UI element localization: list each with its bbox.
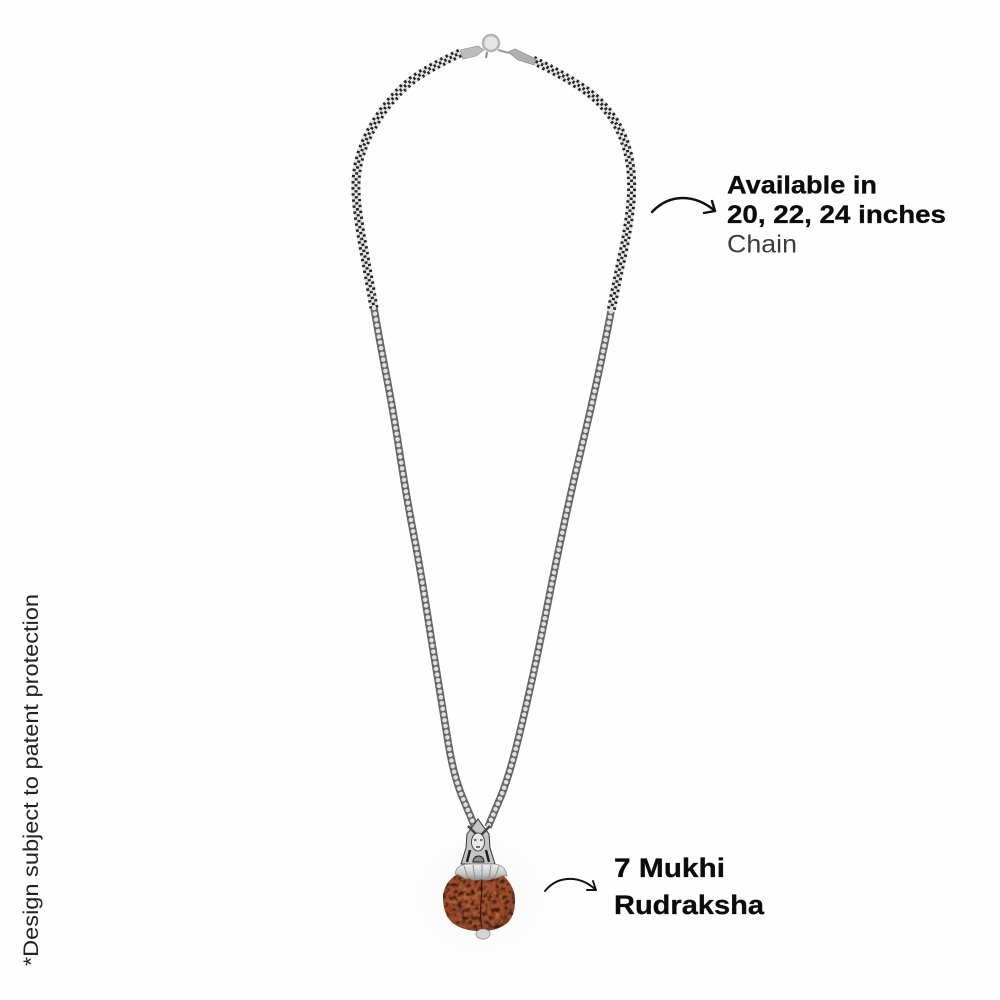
silver bottom bead cap	[476, 929, 490, 939]
soft shadow behind pendant	[390, 815, 570, 975]
arrow to rudraksha callout	[545, 879, 596, 891]
silver deity bail	[461, 819, 495, 864]
callout: chain lengths	[727, 172, 946, 258]
silver petal cap	[455, 864, 507, 880]
vertical footnote: *Design subject to patent protection	[19, 594, 43, 966]
heading: chain sizes: 20, 22, 24 inches	[727, 201, 946, 229]
rudraksha bead	[443, 874, 515, 931]
necklace chain	[356, 53, 632, 827]
heading: 7 Mukhi: 7 Mukhi	[614, 853, 725, 883]
callout: rudraksha	[614, 853, 765, 920]
heading: Rudraksha: Rudraksha	[614, 890, 765, 920]
chain clasp	[460, 35, 536, 65]
arrow to chain callout	[652, 198, 715, 213]
left chain strand	[356, 53, 475, 827]
heading: Available in: Available in	[727, 172, 877, 200]
label: Chain: Chain	[727, 230, 797, 258]
rudraksha pendant	[440, 819, 518, 939]
right chain strand	[488, 60, 632, 827]
